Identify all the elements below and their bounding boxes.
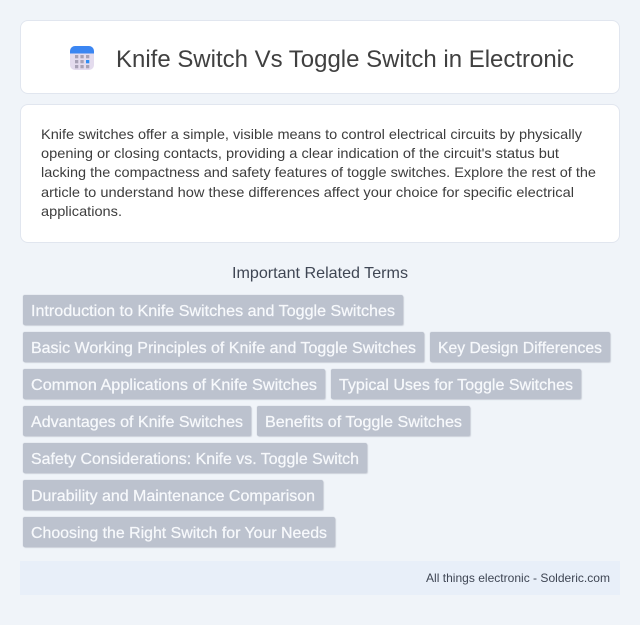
tag: durability xyxy=(23,480,323,510)
tag labels: Basic Working Principles of Knife and Toggle Switches xyxy=(31,340,416,357)
panel: title card xyxy=(20,20,620,94)
tag labels: Common Applications of Knife Switches xyxy=(31,377,317,394)
description text: article to understand how these differences affect your choice for specific electrical xyxy=(41,184,574,200)
tag labels: Introduction to Knife Switches and Toggle Switches xyxy=(31,303,395,320)
tag: knife advantages xyxy=(23,406,251,436)
description text: opening or closing contacts, providing a clear indication of the circuit's status but xyxy=(41,145,559,161)
panel: description card xyxy=(20,104,620,243)
panel: footer bar xyxy=(20,561,620,595)
description text: lacking the compactness and safety features of toggle switches. Explore the rest of the xyxy=(41,164,596,180)
tag: toggle uses xyxy=(331,369,581,399)
description text: applications. xyxy=(41,203,122,219)
tag: working principles xyxy=(23,332,424,362)
description text xyxy=(41,126,596,219)
tag labels: Key Design Differences xyxy=(438,340,602,357)
title: Knife Switch Vs Toggle Switch in Electronic xyxy=(116,46,574,73)
tag labels: Benefits of Toggle Switches xyxy=(265,414,462,431)
tag labels: Advantages of Knife Switches xyxy=(31,414,243,431)
footer credit: All things electronic - Solderic.com xyxy=(426,571,610,585)
tag: choosing xyxy=(23,517,335,547)
section heading: Important Related Terms xyxy=(232,265,408,282)
tag: introduction xyxy=(23,295,403,325)
description text: Knife switches offer a simple, visible means to control electrical circuits by physically xyxy=(41,126,582,142)
tag labels: Choosing the Right Switch for Your Needs xyxy=(31,525,327,542)
icon: calendar grid xyxy=(70,46,94,70)
tag labels xyxy=(31,303,602,542)
tag: design differences xyxy=(430,332,610,362)
tag labels: Typical Uses for Toggle Switches xyxy=(339,377,573,394)
tag: safety xyxy=(23,443,367,473)
tag labels: Safety Considerations: Knife vs. Toggle Switch xyxy=(31,451,359,468)
tag: knife applications xyxy=(23,369,325,399)
tag: toggle benefits xyxy=(257,406,470,436)
tag labels: Durability and Maintenance Comparison xyxy=(31,488,315,505)
